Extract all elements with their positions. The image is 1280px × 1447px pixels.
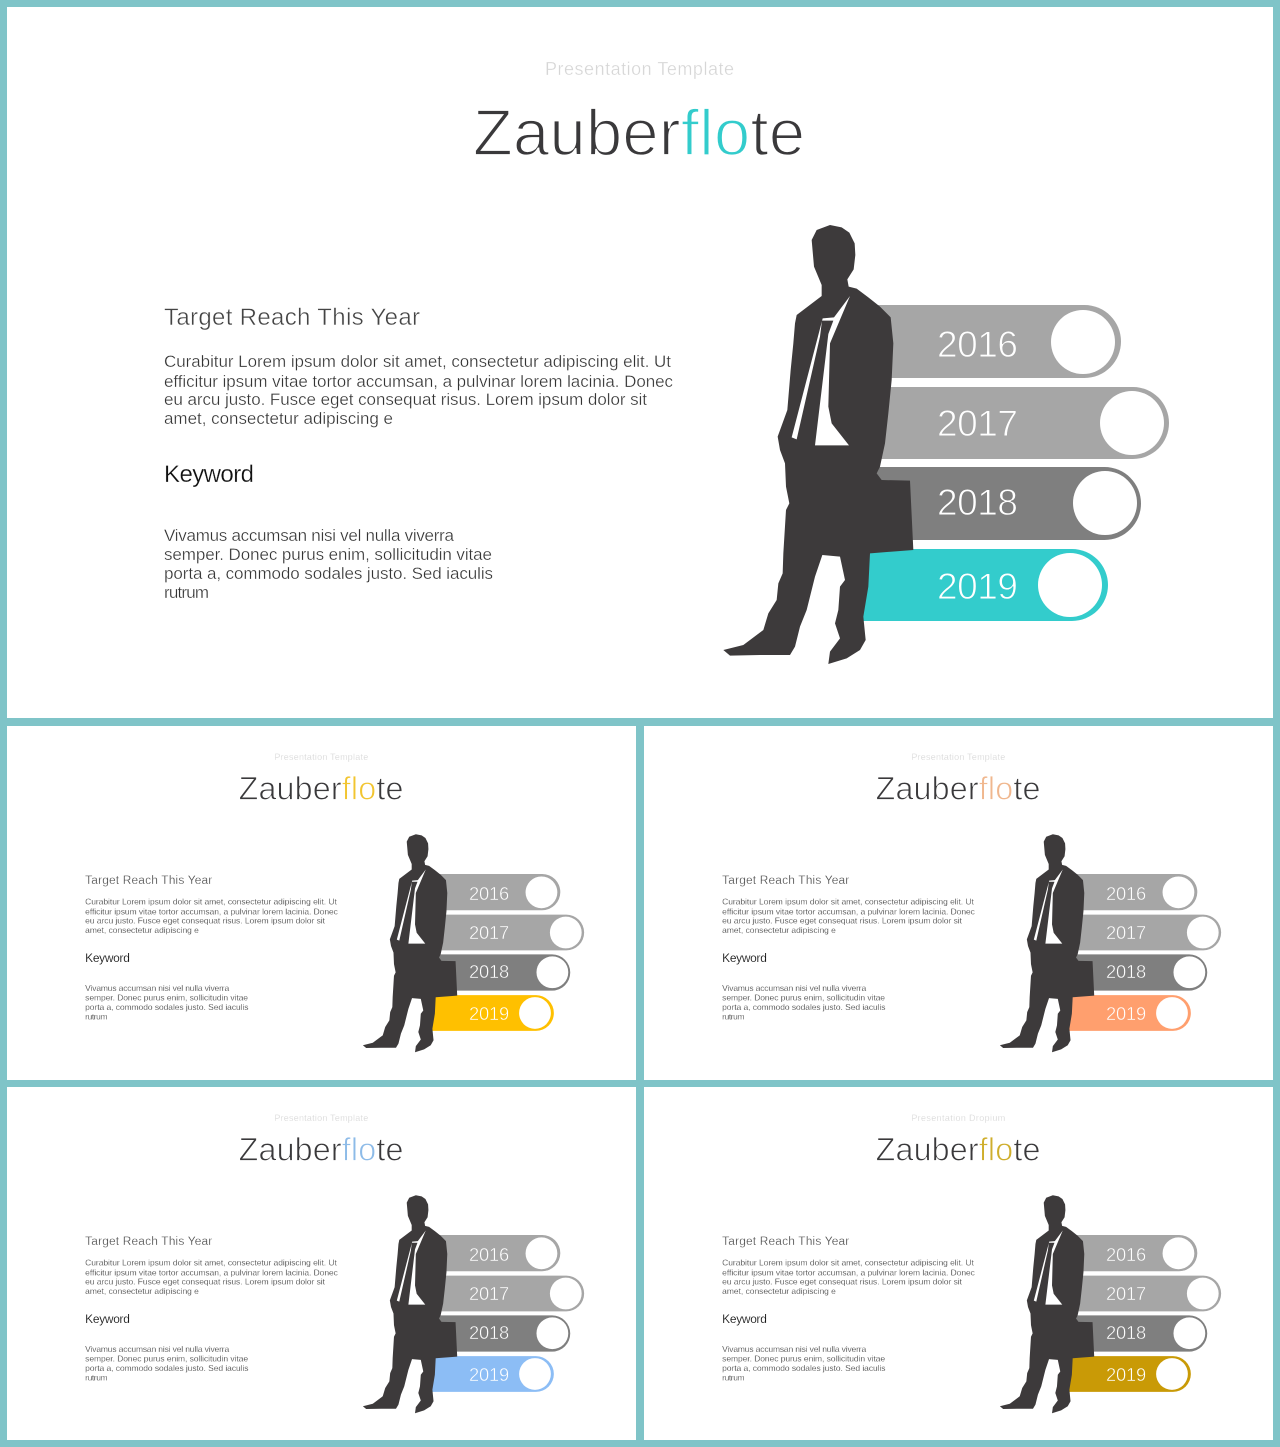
text block: keyword description: semper. Donec purus enim, sollicitudin vitae	[85, 993, 248, 1003]
pill: 2016	[870, 305, 1121, 378]
text block: description	[85, 1258, 338, 1296]
pill: 2019	[1065, 1356, 1191, 1392]
pill: 2019: 2019	[1106, 1364, 1146, 1385]
text block: keyword description: Vivamus accumsan nisi vel nulla viverra	[164, 526, 455, 545]
text block: description: efficitur ipsum vitae tortor accumsan, a pulvinar lorem lacinia. Donec	[164, 372, 674, 391]
pill: 2019	[428, 995, 554, 1031]
pill: 2016: 2016	[469, 883, 509, 904]
title: Zauberflote	[239, 1131, 403, 1167]
text block: description: eu arcu justo. Fusce eget consequat risus. Lorem ipsum dolor sit	[85, 1277, 326, 1287]
panel: main slide teal	[7, 7, 1273, 718]
pill: 2017: 2017	[1106, 922, 1146, 943]
text block: keyword description: rutrum	[164, 583, 209, 602]
pill: 2016: 2016	[1106, 883, 1146, 904]
subtitle: Presentation Template	[274, 1113, 368, 1123]
pill: 2017	[1073, 915, 1221, 950]
text block: keyword description: porta a, commodo sodales justo. Sed iaculis	[722, 1002, 886, 1012]
panel: slide gold	[644, 1087, 1273, 1440]
pill: 2016: 2016	[1106, 1244, 1146, 1265]
text block: description: eu arcu justo. Fusce eget consequat risus. Lorem ipsum dolor sit	[722, 1277, 963, 1287]
text block: description: Curabitur Lorem ipsum dolor sit amet, consectetur adipiscing elit. Ut	[722, 1258, 975, 1268]
heading: keyword: Keyword	[85, 951, 130, 965]
text block: keyword description: semper. Donec purus enim, sollicitudin vitae	[722, 1354, 885, 1364]
pill: 2019	[428, 1356, 554, 1392]
text block: keyword description: porta a, commodo sodales justo. Sed iaculis	[85, 1363, 249, 1373]
pill: 2017	[436, 915, 584, 950]
icon: businessman silhouette	[723, 225, 913, 664]
text block: keyword description: Vivamus accumsan nisi vel nulla viverra	[85, 1344, 229, 1354]
text block: keyword description: porta a, commodo sodales justo. Sed iaculis	[164, 564, 493, 583]
title: Zauberflote	[239, 770, 403, 806]
pill: 2018: 2018	[937, 482, 1018, 523]
pill: 2016: 2016	[469, 1244, 509, 1265]
icon: businessman silhouette	[1000, 1195, 1094, 1413]
icon: businessman silhouette	[363, 1195, 457, 1413]
pill: 2016	[1073, 874, 1197, 910]
text block: keyword description: rutrum	[722, 1372, 745, 1382]
pill: 2018: 2018	[1106, 1322, 1146, 1343]
text block: description: amet, consectetur adipiscing e	[85, 925, 199, 935]
text block: description: efficitur ipsum vitae tortor accumsan, a pulvinar lorem lacinia. Donec	[722, 907, 975, 917]
pill: 2018: 2018	[469, 1322, 509, 1343]
title: Zauberflote	[876, 1131, 1040, 1167]
text block: description: amet, consectetur adipiscing e	[722, 1286, 836, 1296]
text block: description: efficitur ipsum vitae tortor accumsan, a pulvinar lorem lacinia. Donec	[85, 1268, 338, 1278]
text block: keyword description: Vivamus accumsan nisi vel nulla viverra	[722, 983, 866, 993]
heading: target reach: Target Reach This Year	[164, 304, 420, 331]
heading: keyword: Keyword	[722, 951, 767, 965]
pill: 2019: 2019	[469, 1003, 509, 1024]
text block: keyword description	[164, 526, 493, 602]
text block: description: amet, consectetur adipiscing e	[85, 1286, 199, 1296]
pill: 2016	[436, 1235, 560, 1271]
pill: 2019: 2019	[469, 1364, 509, 1385]
text block: description	[164, 352, 674, 428]
panel: slide orange	[644, 726, 1273, 1080]
pill: 2017	[436, 1276, 584, 1311]
text block: description: eu arcu justo. Fusce eget consequat risus. Lorem ipsum dolor sit	[164, 390, 647, 409]
pill: 2019: 2019	[1106, 1003, 1146, 1024]
text block: keyword description	[85, 1344, 249, 1382]
heading: target reach: Target Reach This Year	[85, 873, 212, 887]
pill: 2016	[436, 874, 560, 910]
text block: description: amet, consectetur adipiscing e	[164, 409, 393, 428]
pill: 2019	[1065, 995, 1191, 1031]
text block: description: efficitur ipsum vitae tortor accumsan, a pulvinar lorem lacinia. Donec	[722, 1268, 975, 1278]
heading: keyword: Keyword	[164, 461, 254, 488]
heading: target reach: Target Reach This Year	[722, 1234, 849, 1248]
pill: 2018	[431, 1315, 570, 1352]
pill: 2019	[855, 549, 1108, 621]
text block: keyword description: Vivamus accumsan nisi vel nulla viverra	[722, 1344, 866, 1354]
subtitle: Presentation Template	[911, 752, 1005, 762]
title: Zauberflote	[876, 770, 1040, 806]
text block: description: Curabitur Lorem ipsum dolor sit amet, consectetur adipiscing elit. Ut	[85, 897, 338, 907]
pill: 2017: 2017	[469, 1283, 509, 1304]
text block: keyword description	[85, 983, 249, 1021]
icon: businessman silhouette	[363, 834, 457, 1052]
text block: keyword description: rutrum	[722, 1011, 745, 1021]
panel: slide yellow	[7, 726, 636, 1080]
pill: 2018	[860, 467, 1141, 540]
heading: target reach: Target Reach This Year	[85, 1234, 212, 1248]
text block: keyword description: semper. Donec purus enim, sollicitudin vitae	[85, 1354, 248, 1364]
text block: keyword description: semper. Donec purus enim, sollicitudin vitae	[722, 993, 885, 1003]
title: Zauberflote	[473, 96, 805, 169]
text block: keyword description: rutrum	[85, 1011, 108, 1021]
pill: 2019: 2019	[937, 566, 1018, 607]
panel: slide blue	[7, 1087, 636, 1440]
pill: 2017: 2017	[1106, 1283, 1146, 1304]
pill: 2017: 2017	[937, 403, 1018, 444]
text block: keyword description: Vivamus accumsan nisi vel nulla viverra	[85, 983, 229, 993]
pill: 2016	[1073, 1235, 1197, 1271]
subtitle: Presentation Template	[545, 59, 734, 79]
pill: 2018	[431, 954, 570, 991]
heading: target reach: Target Reach This Year	[722, 873, 849, 887]
heading: keyword: Keyword	[722, 1312, 767, 1326]
pill: 2018: 2018	[469, 961, 509, 982]
text block: keyword description: porta a, commodo sodales justo. Sed iaculis	[85, 1002, 249, 1012]
text block: keyword description: rutrum	[85, 1372, 108, 1382]
pill: 2017: 2017	[469, 922, 509, 943]
text block: description	[722, 897, 975, 935]
text block: description: efficitur ipsum vitae tortor accumsan, a pulvinar lorem lacinia. Donec	[85, 907, 338, 917]
text block: description: Curabitur Lorem ipsum dolor sit amet, consectetur adipiscing elit. Ut	[164, 352, 671, 371]
pill: 2018	[1068, 954, 1207, 991]
pill: 2018: 2018	[1106, 961, 1146, 982]
icon: businessman silhouette	[1000, 834, 1094, 1052]
subtitle: Presentation Dropium	[911, 1113, 1005, 1123]
subtitle: Presentation Template	[274, 752, 368, 762]
text block: description: amet, consectetur adipiscing e	[722, 925, 836, 935]
pill: 2017	[1073, 1276, 1221, 1311]
text block: keyword description: semper. Donec purus enim, sollicitudin vitae	[164, 545, 492, 564]
text block: description	[722, 1258, 975, 1296]
text block: keyword description	[722, 1344, 886, 1382]
text block: description: eu arcu justo. Fusce eget consequat risus. Lorem ipsum dolor sit	[722, 916, 963, 926]
text block: description: eu arcu justo. Fusce eget consequat risus. Lorem ipsum dolor sit	[85, 916, 326, 926]
text block: description	[85, 897, 338, 935]
heading: keyword: Keyword	[85, 1312, 130, 1326]
text block: keyword description: porta a, commodo sodales justo. Sed iaculis	[722, 1363, 886, 1373]
pill: 2018	[1068, 1315, 1207, 1352]
text block: keyword description	[722, 983, 886, 1021]
pill: 2016: 2016	[937, 324, 1018, 365]
text block: description: Curabitur Lorem ipsum dolor sit amet, consectetur adipiscing elit. Ut	[722, 897, 975, 907]
text block: description: Curabitur Lorem ipsum dolor sit amet, consectetur adipiscing elit. Ut	[85, 1258, 338, 1268]
pill: 2017	[870, 387, 1169, 459]
